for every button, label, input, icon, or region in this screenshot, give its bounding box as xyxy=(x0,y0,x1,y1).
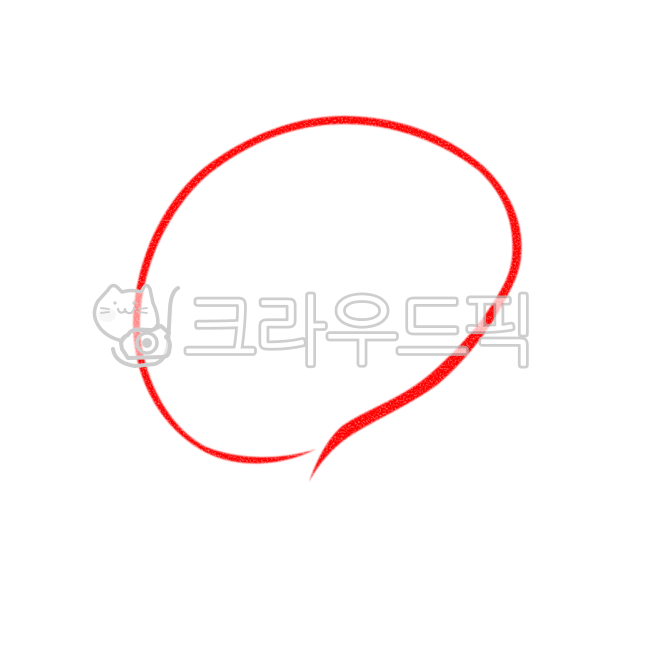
cat tail xyxy=(113,288,178,366)
watermark wordmark: 라 xyxy=(254,289,326,375)
cat head xyxy=(94,285,158,341)
watermark wordmark: 크 xyxy=(184,289,256,375)
watermark: crowdpic logo xyxy=(94,285,536,375)
speech bubble outline with tail xyxy=(133,116,522,482)
camera xyxy=(121,326,170,358)
camera lens xyxy=(137,333,157,353)
cat mouth xyxy=(118,308,134,313)
watermark wordmark: 드 xyxy=(396,289,468,375)
cat cheeks xyxy=(98,308,116,322)
watermark wordmark: 픽 xyxy=(464,289,536,375)
cat eyes xyxy=(113,301,117,305)
icon: cat with camera xyxy=(94,285,178,366)
watermark wordmark: 우 xyxy=(326,289,398,375)
cat whiskers xyxy=(101,308,147,313)
